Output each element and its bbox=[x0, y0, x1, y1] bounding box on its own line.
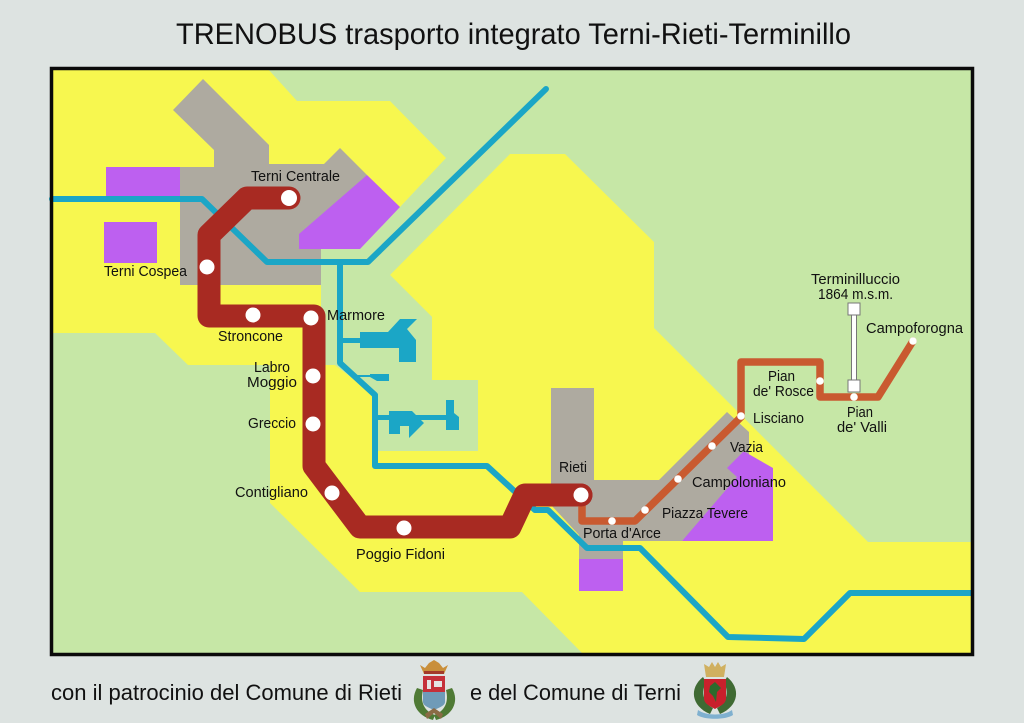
station labels: Contigliano bbox=[235, 485, 308, 501]
railway line: branch blue bbox=[340, 262, 972, 639]
footer text: Terni patronage: e del Comune di Terni bbox=[470, 680, 681, 705]
trenobus line: red section Terni to Rieti bbox=[209, 198, 581, 527]
purple zone: Rieti east bbox=[682, 452, 773, 541]
icon: small power station bbox=[355, 374, 389, 381]
purple zone: Terni east bbox=[299, 175, 400, 249]
purple zone: Terni west bbox=[106, 167, 180, 197]
yellow area: central and eastern bbox=[270, 154, 972, 654]
purple zone: Rieti south bbox=[579, 559, 623, 591]
station labels: Pian bbox=[768, 369, 795, 385]
station labels: Campoloniano bbox=[692, 475, 786, 491]
map base: green countryside bbox=[52, 69, 972, 654]
station labels: Vazia bbox=[730, 440, 764, 456]
station labels: Greccio bbox=[248, 416, 296, 432]
stops on orange line bbox=[608, 337, 917, 525]
station labels: Moggio bbox=[247, 375, 297, 391]
station labels: Pian bbox=[847, 405, 873, 421]
icon: coat of arms of Terni bbox=[694, 662, 736, 719]
icon: Marmore dam bbox=[340, 319, 417, 362]
station labels: Terminilluccio bbox=[811, 272, 900, 288]
station labels: de' Rosce bbox=[753, 384, 814, 400]
bus line: orange section Rieti to Campoforogna bbox=[582, 341, 913, 521]
purple zone: Terni Cospea bbox=[104, 222, 157, 263]
station labels: Rieti bbox=[559, 460, 587, 476]
station labels: Terni Cospea bbox=[104, 264, 188, 280]
green area: Marmore valley bbox=[321, 248, 478, 451]
station labels: Campoforogna bbox=[866, 321, 964, 337]
title: TRENOBUS trasporto integrato Terni-Rieti-Terminillo bbox=[176, 18, 851, 51]
station labels bbox=[104, 169, 964, 563]
station labels: Lisciano bbox=[753, 411, 804, 427]
map panel bbox=[52, 68, 972, 654]
yellow area: west Terni bbox=[52, 69, 446, 365]
station labels: Stroncone bbox=[218, 329, 283, 345]
icon: coat of arms of Rieti bbox=[414, 660, 455, 720]
map frame bbox=[52, 68, 972, 654]
red line over Rieti terminus bbox=[570, 484, 592, 506]
railway line: main blue bbox=[52, 89, 546, 262]
grey urban area: Terni bbox=[173, 79, 367, 285]
station labels: Poggio Fidoni bbox=[356, 547, 445, 563]
stations on red line bbox=[200, 190, 588, 536]
station labels: Terni Centrale bbox=[251, 169, 340, 185]
station labels: Marmore bbox=[327, 308, 385, 324]
grey urban area: Rieti bbox=[551, 388, 749, 559]
station labels: Piazza Tevere bbox=[662, 506, 748, 522]
station labels: Labro bbox=[254, 360, 290, 376]
station labels: 1864 m.s.m. bbox=[818, 287, 893, 303]
icon: cable car Pian de' Valli to Terminilluccio bbox=[848, 303, 860, 392]
icon: lake and power station bbox=[375, 400, 459, 438]
footer text: Rieti patronage: con il patrocinio del Comune di Rieti bbox=[51, 680, 402, 705]
station labels: de' Valli bbox=[837, 420, 887, 436]
station labels: Porta d'Arce bbox=[583, 526, 661, 542]
